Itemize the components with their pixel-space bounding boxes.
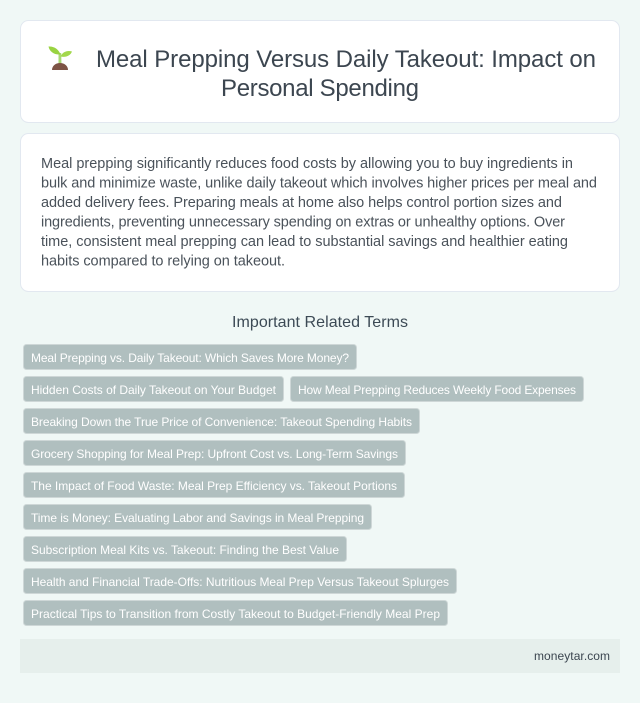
tag 9: [24, 568, 456, 594]
tag 7: Time is Money: Evaluating Labor and Savings in Meal Prepping: [31, 511, 364, 525]
tag 8: Subscription Meal Kits vs. Takeout: Finding the Best Value: [31, 543, 339, 557]
tags: related terms: [24, 344, 584, 626]
footer: [20, 639, 620, 673]
tag 7: [24, 504, 372, 530]
title: Meal Prepping Versus Daily Takeout: Impact on: [96, 46, 596, 73]
tag 5: [24, 440, 406, 466]
text block: summary: ingredients, preventing unnecessary spending on extras or unhealthy options. Over: [41, 214, 565, 230]
footer: moneytar.com: [534, 649, 610, 663]
tag 1: Meal Prepping vs. Daily Takeout: Which Saves More Money?: [31, 351, 349, 365]
tag 4: [24, 408, 420, 434]
text block: summary: [41, 156, 597, 270]
icon: sprout: [48, 46, 72, 70]
tag 2: [24, 376, 284, 402]
text block: summary: added delivery fees. Preparing meals at home also helps control portion sizes and: [41, 195, 562, 211]
tag 9: Health and Financial Trade-Offs: Nutritious Meal Prep Versus Takeout Splurges: [31, 575, 449, 589]
title: [96, 46, 596, 102]
tag 8: [24, 536, 346, 562]
title: Personal Spending: [221, 75, 419, 102]
panel: header: [20, 20, 620, 122]
tag 10: Practical Tips to Transition from Costly Takeout to Budget-Friendly Meal Prep: [31, 607, 440, 621]
tag 6: The Impact of Food Waste: Meal Prep Efficiency vs. Takeout Portions: [31, 479, 397, 493]
tag 4: Breaking Down the True Price of Convenience: Takeout Spending Habits: [31, 415, 412, 429]
text block: summary: time, consistent meal prepping can lead to substantial savings and healthier eating: [41, 234, 568, 250]
panel: summary paragraph: [20, 134, 620, 292]
tag 10: [24, 600, 448, 626]
tag 3: [290, 376, 584, 402]
heading: related terms: Important Related Terms: [232, 314, 408, 331]
tag 6: [24, 472, 404, 498]
text block: summary: bulk and minimize waste, unlike daily takeout which involves higher prices per meal and: [41, 176, 597, 192]
tag 2: Hidden Costs of Daily Takeout on Your Budget: [31, 383, 277, 397]
tag 3: How Meal Prepping Reduces Weekly Food Expenses: [298, 383, 576, 397]
tag 1: [24, 344, 356, 370]
text block: summary: habits compared to relying on takeout.: [41, 254, 285, 270]
text block: summary: Meal prepping significantly reduces food costs by allowing you to buy ingredients in: [41, 156, 573, 172]
tag 5: Grocery Shopping for Meal Prep: Upfront Cost vs. Long-Term Savings: [31, 447, 398, 461]
